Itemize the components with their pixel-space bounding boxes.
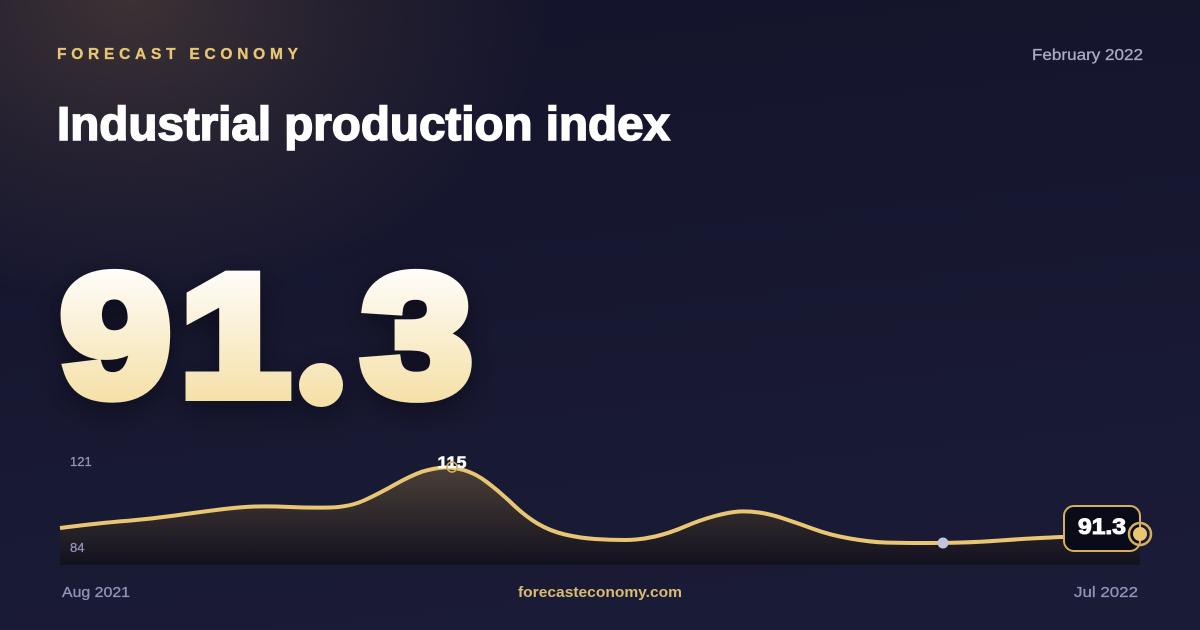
peak marker <box>447 462 457 472</box>
eyebrow: brand name: FORECAST ECONOMY <box>57 46 299 63</box>
date: February 2022 <box>1032 47 1143 64</box>
axis max label: 121 <box>70 454 92 469</box>
chart area fill <box>60 467 1140 565</box>
current value marker <box>1129 523 1151 545</box>
chart line <box>60 467 1140 543</box>
low marker <box>938 538 948 548</box>
title: Industrial production index <box>57 97 670 150</box>
current value badge: 91.3 <box>1078 514 1126 539</box>
axis min label: 84 <box>70 540 84 555</box>
line chart <box>60 453 1151 565</box>
peak label: 115 <box>438 453 466 472</box>
end date: Jul 2022 <box>1074 585 1138 601</box>
start date: Aug 2021 <box>62 585 130 601</box>
website: forecasteconomy.com <box>518 585 682 601</box>
current value badge <box>1064 506 1140 551</box>
headline value: 91.3 <box>61 240 472 432</box>
